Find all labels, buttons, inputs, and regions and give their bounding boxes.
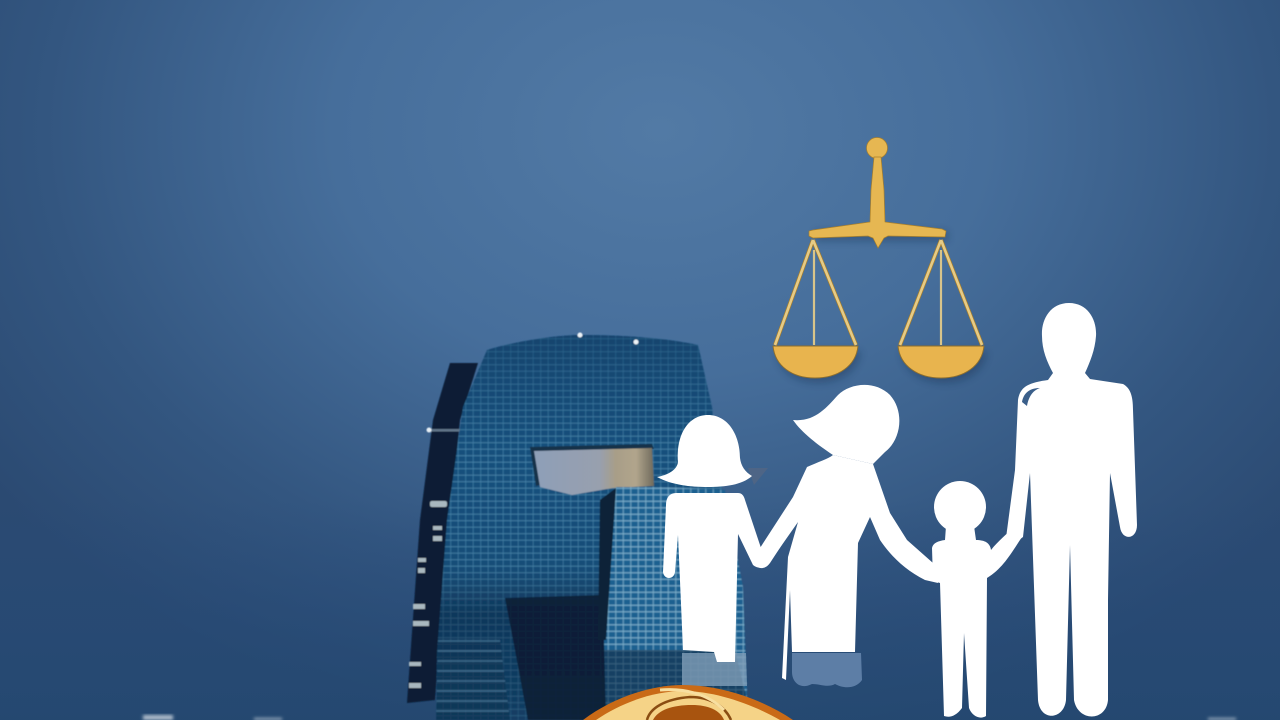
left pan	[773, 240, 858, 378]
father shoulder shadow	[1022, 388, 1040, 406]
window opening	[530, 444, 654, 495]
dark lower shadow	[505, 595, 612, 720]
right pan	[898, 240, 984, 378]
distant skyline	[143, 715, 1236, 720]
front tower block	[604, 487, 747, 720]
child	[932, 481, 1022, 718]
coin	[583, 685, 793, 720]
scales of justice	[773, 138, 987, 383]
main tower	[436, 335, 747, 720]
girl lower legs tint	[682, 653, 747, 686]
scales shadow	[776, 231, 987, 383]
scales beam and stem	[809, 138, 946, 248]
back tower	[407, 363, 478, 703]
smear beside girl	[748, 468, 768, 485]
tower	[407, 332, 747, 720]
striped lower left	[436, 640, 510, 720]
father	[1006, 303, 1137, 716]
mother	[757, 385, 938, 680]
girl	[657, 415, 798, 662]
family silhouettes	[657, 303, 1137, 718]
roof lights	[578, 332, 638, 344]
mother lower legs	[792, 653, 862, 687]
